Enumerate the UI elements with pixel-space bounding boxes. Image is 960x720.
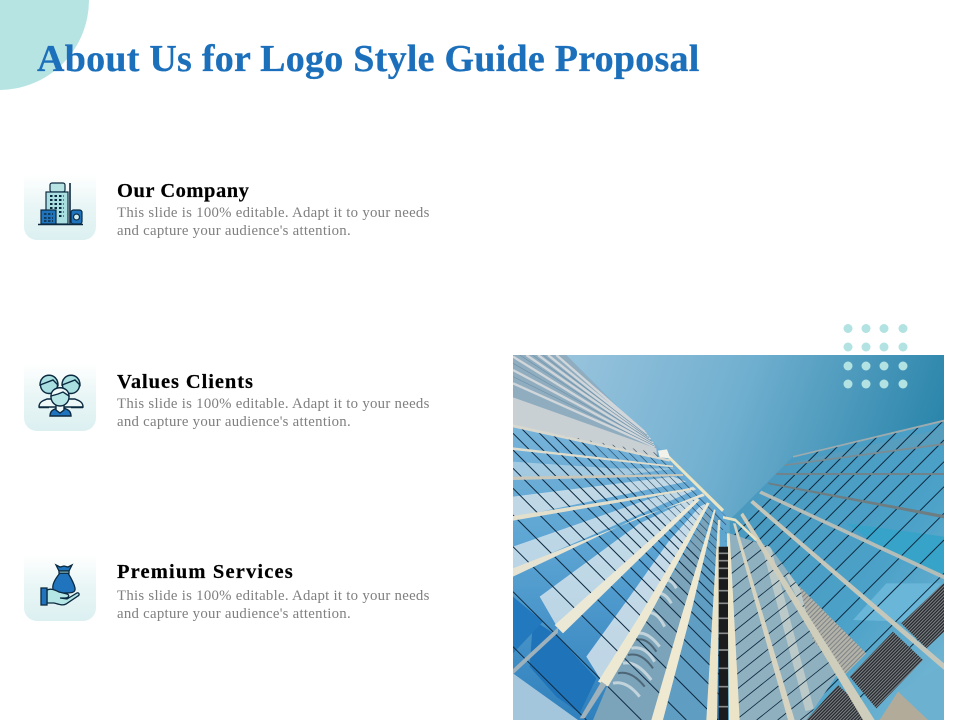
photo: glass skyscrapers seen from below: [513, 355, 944, 720]
text: premium services: Premium Services: [117, 561, 294, 583]
upper left tower stripes: [513, 355, 658, 457]
reflected tan building and sky: [880, 665, 944, 720]
icon: group of clients: [38, 374, 84, 417]
text: our company: Our Company: [117, 180, 249, 202]
text: premium services: [117, 561, 430, 622]
icon card: premium services: [24, 555, 96, 621]
dark hatched louvres: [806, 583, 944, 720]
text: values clients: [117, 371, 430, 430]
text: our company: This slide is 100% editable. Adapt it to your needs: [117, 205, 430, 221]
left facade: [513, 355, 726, 720]
pale reflections and panes: [513, 462, 720, 720]
reflected grey building: [800, 587, 866, 677]
cream structural beams: [513, 420, 944, 720]
decorative corner circle: [0, 0, 89, 90]
title: About Us for Logo Style Guide Proposal: [37, 38, 700, 80]
text: premium services: This slide is 100% editable. Adapt it to your needs: [117, 588, 430, 604]
decorative dot grid: [844, 324, 908, 388]
icon card: values clients: [24, 364, 96, 431]
right facade: [730, 420, 944, 720]
right facade mullions: [734, 422, 944, 698]
reflective lattice near the core: [730, 534, 836, 720]
icon: office building: [38, 182, 83, 226]
icon: hand holding money bag: [40, 564, 80, 606]
text: values clients: This slide is 100% editable. Adapt it to your needs: [117, 396, 430, 412]
left facade mullions: [513, 429, 726, 720]
text: premium services: and capture your audience's attention.: [117, 606, 351, 622]
text: our company: [117, 180, 430, 239]
text: values clients: Values Clients: [117, 371, 254, 393]
icon card: our company: [24, 175, 96, 240]
sky: [513, 355, 944, 720]
central dark elevator strip: [719, 530, 728, 720]
text: our company: and capture your audience's attention.: [117, 223, 351, 239]
text: values clients: and capture your audience's attention.: [117, 414, 351, 430]
